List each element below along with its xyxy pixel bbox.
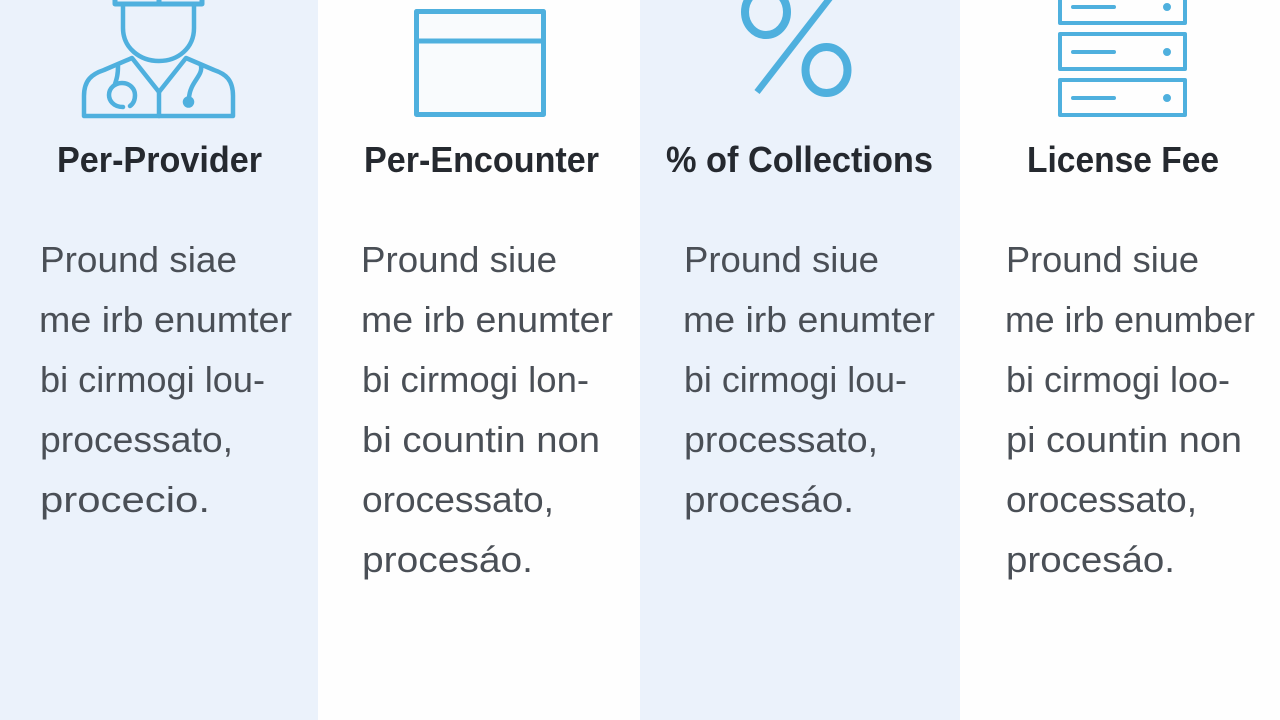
text block: Per-Encounter description: orocessato, bbox=[362, 479, 554, 520]
heading: License Fee: License Fee bbox=[1027, 139, 1219, 180]
text block: % of Collections description: me irb enumter bbox=[683, 299, 935, 340]
panel: Per-Provider bbox=[0, 0, 318, 720]
text block: License Fee description bbox=[1005, 239, 1255, 580]
text block: License Fee description: bi cirmogi loo- bbox=[1006, 359, 1230, 400]
text block: Per-Provider description: me irb enumter bbox=[39, 299, 292, 340]
text block: Per-Encounter description: bi countin non bbox=[362, 419, 600, 460]
panel: Per-Encounter bbox=[318, 0, 640, 720]
icon: percent bbox=[745, 0, 848, 93]
text block: % of Collections description: bi cirmogi lou- bbox=[684, 359, 907, 400]
text block: License Fee description: pi countin non bbox=[1006, 419, 1242, 460]
text block: Per-Provider description bbox=[39, 239, 292, 520]
text block: Per-Encounter description: bi cirmogi lon- bbox=[362, 359, 589, 400]
text block: Per-Encounter description bbox=[361, 239, 613, 580]
text block: License Fee description: procesáo. bbox=[1006, 539, 1175, 580]
text block: Per-Provider description: procecio. bbox=[40, 479, 210, 520]
text block: Per-Provider description: bi cirmogi lou- bbox=[40, 359, 265, 400]
text block: Per-Encounter description: procesáo. bbox=[362, 539, 533, 580]
heading: Per-Encounter: Per-Encounter bbox=[364, 139, 599, 180]
text block: License Fee description: me irb enumber bbox=[1005, 299, 1255, 340]
text block: Per-Provider description: Pround siae bbox=[40, 239, 237, 280]
text block: License Fee description: orocessato, bbox=[1006, 479, 1197, 520]
heading: Per-Provider: Per-Provider bbox=[57, 139, 262, 180]
icon: server rack bbox=[1060, 0, 1185, 115]
text block: Per-Encounter description: me irb enumter bbox=[361, 299, 613, 340]
panel: % of Collections bbox=[640, 0, 960, 720]
text block: % of Collections description: procesáo. bbox=[684, 479, 854, 520]
text block: % of Collections description bbox=[683, 239, 935, 520]
text block: Per-Provider description: processato, bbox=[40, 419, 233, 460]
text block: License Fee description: Pround siue bbox=[1006, 239, 1199, 280]
icon: window bbox=[416, 12, 544, 114]
text block: Per-Encounter description: Pround siue bbox=[361, 239, 557, 280]
panel: License Fee bbox=[960, 0, 1280, 720]
text block: % of Collections description: Pround siue bbox=[684, 239, 879, 280]
heading: % of Collections: % of Collections bbox=[666, 139, 933, 180]
text block: % of Collections description: processato, bbox=[684, 419, 878, 460]
icon: doctor bbox=[84, 0, 233, 116]
